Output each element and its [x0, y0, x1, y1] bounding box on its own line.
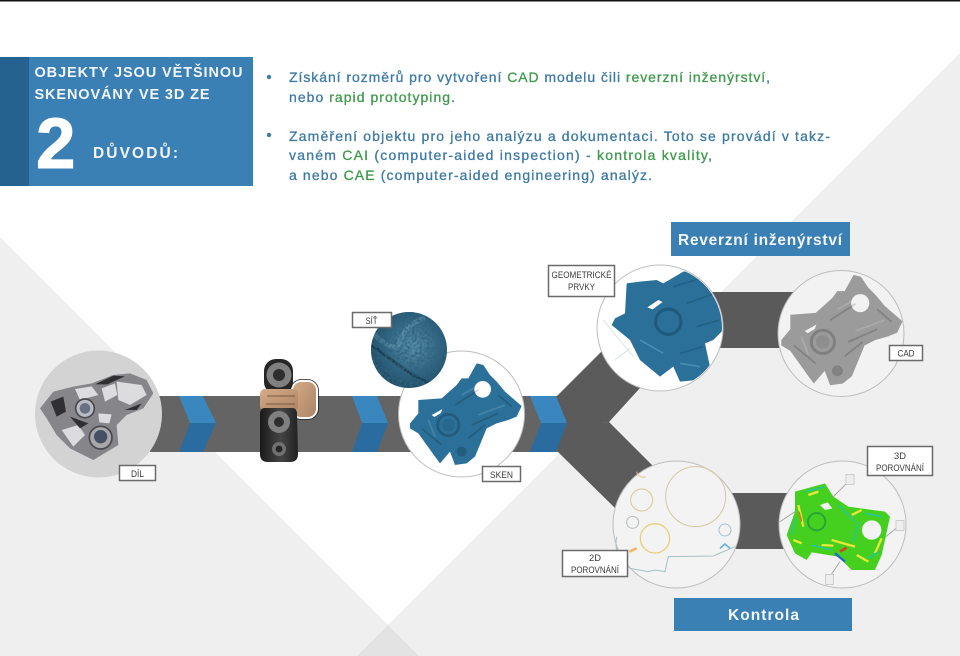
mesh detail circle — [371, 312, 447, 388]
arrow 1 — [179, 396, 216, 452]
label: CAD: CAD — [898, 348, 915, 360]
heading: reverse engineering: Reverzní inženýrství — [678, 232, 843, 249]
panel heading: OBJEKTY JSOU VĚTŠINOU — [34, 63, 242, 81]
label: 3D comparison: POROVNÁNÍ — [876, 463, 924, 474]
scanner body — [260, 408, 298, 462]
geometric features circle — [597, 265, 723, 391]
3D comparison circle — [779, 461, 906, 588]
label: geometric features — [548, 266, 614, 296]
heading: reverse engineering — [671, 222, 850, 256]
bullet two — [267, 133, 271, 137]
arrow 3 — [530, 396, 567, 452]
big number: 2 — [36, 105, 76, 184]
label: 2D comparison: 2D — [589, 553, 601, 564]
top lens — [264, 359, 293, 394]
panel dark strip — [0, 57, 29, 186]
label: 2D comparison — [562, 550, 628, 576]
2D comparison circle — [613, 461, 740, 588]
fork: lower branch — [557, 422, 660, 508]
bullet one — [267, 75, 271, 79]
label: part — [120, 466, 156, 480]
label: 3D comparison — [868, 446, 932, 476]
header panel — [0, 57, 253, 186]
background: right grey triangle — [357, 53, 960, 656]
label: scan: SKEN — [490, 470, 513, 481]
label: 2D comparison: POROVNÁNÍ — [571, 565, 619, 576]
fork: upper branch — [557, 313, 680, 424]
bullet list — [267, 69, 830, 183]
label: geometric features: PRVKY — [568, 282, 596, 293]
top rule — [0, 0, 960, 2]
reason two line two: vaném CAI (computer-aided inspection) - kontrola kvality, — [289, 147, 712, 163]
label: CAD — [890, 346, 922, 360]
panel heading reasons: DŮVODŮ: — [93, 143, 178, 162]
link: inspection — [725, 493, 795, 549]
hand outline — [290, 380, 318, 420]
background: bottom overlap triangle — [357, 625, 419, 656]
label: 3D comparison: 3D — [894, 451, 906, 462]
part photo circle — [35, 350, 162, 478]
label: mesh: SÍŤ — [366, 316, 378, 327]
link: reverse engineering — [710, 292, 795, 348]
heading: inspection — [674, 598, 852, 631]
arrow 2 — [352, 396, 388, 452]
label: geometric features: GEOMETRICKÉ — [552, 270, 612, 281]
heading: inspection: Kontrola — [728, 607, 799, 624]
scan circle — [398, 351, 524, 477]
reason one line two: nebo rapid prototyping. — [289, 89, 455, 105]
reason two line one: Zaměření objektu pro jeho analýzu a dokumentaci. Toto se provádí v takz- — [289, 128, 830, 144]
process band — [150, 396, 565, 452]
background: left grey triangle — [0, 237, 419, 656]
panel heading second line: SKENOVÁNY VE 3D ZE — [34, 86, 210, 103]
label: scan — [482, 466, 520, 482]
hand back — [292, 381, 317, 418]
scanner icon — [260, 359, 318, 462]
label: part: DÍL — [131, 469, 144, 480]
panel background — [0, 57, 253, 186]
reason one line one: Získání rozměrů pro vytvoření CAD modelu čili reverzní inženýrství, — [289, 69, 770, 85]
fist — [260, 389, 298, 411]
label: mesh — [352, 312, 392, 328]
reason two line three: a nebo CAE (computer-aided engineering) analýz. — [289, 167, 652, 183]
CAD circle — [778, 270, 904, 396]
